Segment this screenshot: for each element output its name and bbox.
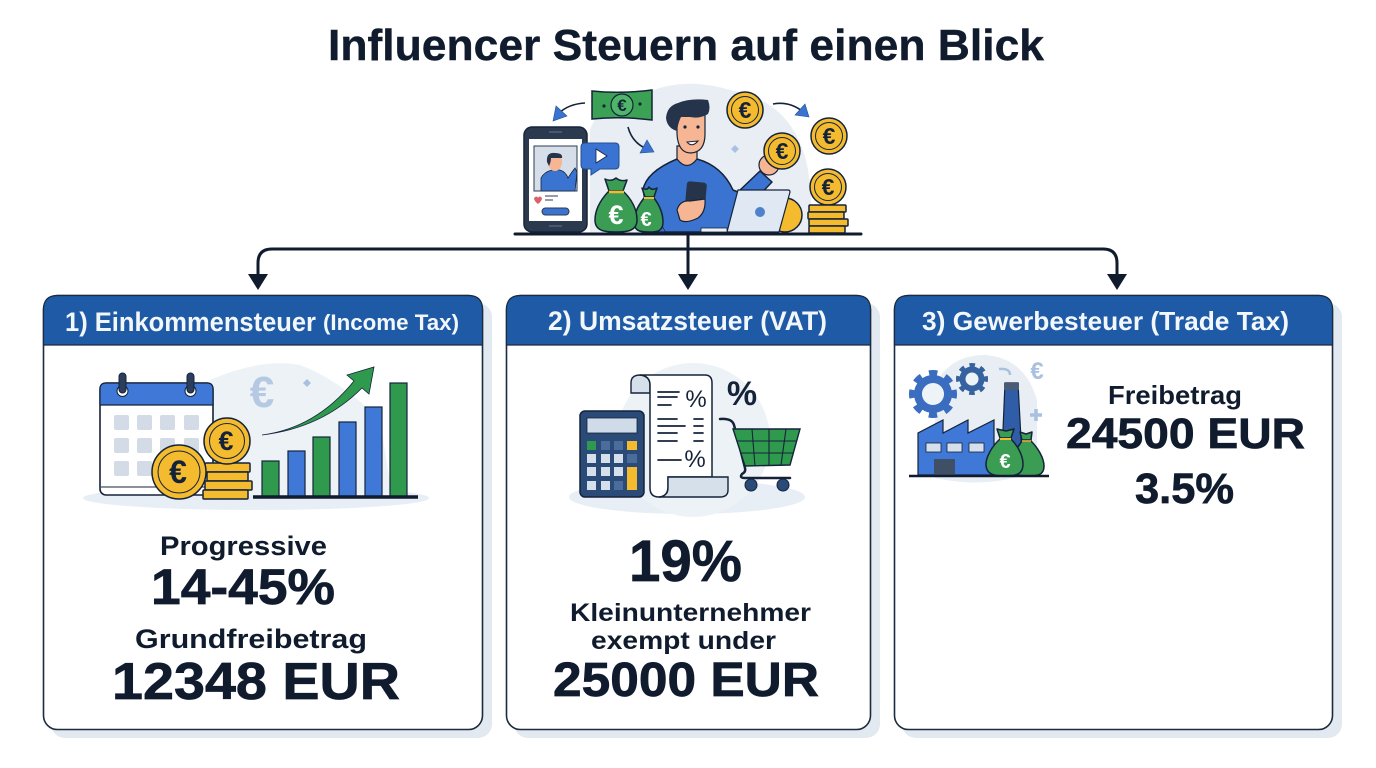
laptop xyxy=(701,190,790,232)
figure: 25000 EUR: 25000 EUR xyxy=(553,654,819,707)
panel: Einkommensteuer xyxy=(44,296,492,738)
illustration: calculator, receipt, cart xyxy=(569,363,805,517)
heading: 2) Umsatzsteuer (VAT) xyxy=(548,306,827,336)
coins: € xyxy=(739,97,752,123)
illustration: calendar, coins, growth chart: € xyxy=(250,368,274,417)
icon: shopping cart xyxy=(720,419,800,491)
money bags: € xyxy=(608,200,624,230)
coins: € xyxy=(776,138,789,164)
icon: coins xyxy=(152,418,252,499)
icon: small gear xyxy=(956,363,988,395)
person xyxy=(643,99,779,232)
text: exempt under: exempt under xyxy=(591,627,776,655)
figure: 12348 EUR: 12348 EUR xyxy=(112,653,400,711)
text: Grundfreibetrag: Grundfreibetrag xyxy=(135,624,367,654)
money bags: € xyxy=(640,209,652,231)
icon: coins: € xyxy=(218,426,234,456)
panel: Gewerbesteuer xyxy=(894,296,1342,738)
figure: 14-45%: 14-45% xyxy=(151,559,335,615)
arrow: coin to coin xyxy=(773,103,809,117)
icon: banknote xyxy=(592,90,652,120)
icon: money bags xyxy=(986,429,1044,476)
hero illustration: influencer with money xyxy=(515,84,861,234)
figure: 3.5%: 3.5% xyxy=(1135,465,1234,513)
coins: € xyxy=(822,174,835,200)
arrow: note to phone xyxy=(553,103,585,121)
heading: 3) Gewerbesteuer (Trade Tax) xyxy=(922,306,1289,336)
icon: receipt: % xyxy=(685,386,707,413)
arrow: note to person xyxy=(628,127,654,153)
icon: play bubble xyxy=(581,143,619,175)
icon: receipt: % xyxy=(684,446,706,473)
text: percent sign: % xyxy=(727,375,757,413)
title: Influencer Steuern auf einen Blick xyxy=(328,21,1045,70)
icon: smartphone with video post xyxy=(524,127,587,232)
heading translation: (Income Tax) xyxy=(323,310,459,335)
icon: coins: € xyxy=(169,454,187,490)
coins: € xyxy=(823,123,836,149)
connector arrows xyxy=(248,234,1127,290)
illustration: factory, gears, money bags xyxy=(909,355,1049,482)
figure: 19%: 19% xyxy=(629,529,742,594)
panel: Umsatzsteuer xyxy=(506,296,880,738)
arrow: growth xyxy=(262,367,374,435)
money bags xyxy=(595,178,663,232)
icon: money bags: € xyxy=(999,451,1011,473)
icon: factory xyxy=(918,383,1023,476)
illustration: factory, gears, money bags: € xyxy=(1030,358,1044,385)
coins xyxy=(727,92,848,233)
bar chart xyxy=(253,383,418,497)
heading: 1) Einkommensteuer xyxy=(65,307,316,337)
icon: calculator xyxy=(580,411,644,497)
icon: calendar xyxy=(100,373,213,495)
figure: 24500 EUR: 24500 EUR xyxy=(1066,410,1305,458)
text: Progressive: Progressive xyxy=(160,531,327,561)
text: Freibetrag: Freibetrag xyxy=(1108,380,1242,410)
icon: large gear xyxy=(909,370,957,418)
icon: banknote: € xyxy=(617,96,627,115)
icon: receipt xyxy=(631,375,728,497)
text: Kleinunternehmer: Kleinunternehmer xyxy=(570,599,811,627)
illustration: calendar, coins, growth chart xyxy=(83,363,429,510)
